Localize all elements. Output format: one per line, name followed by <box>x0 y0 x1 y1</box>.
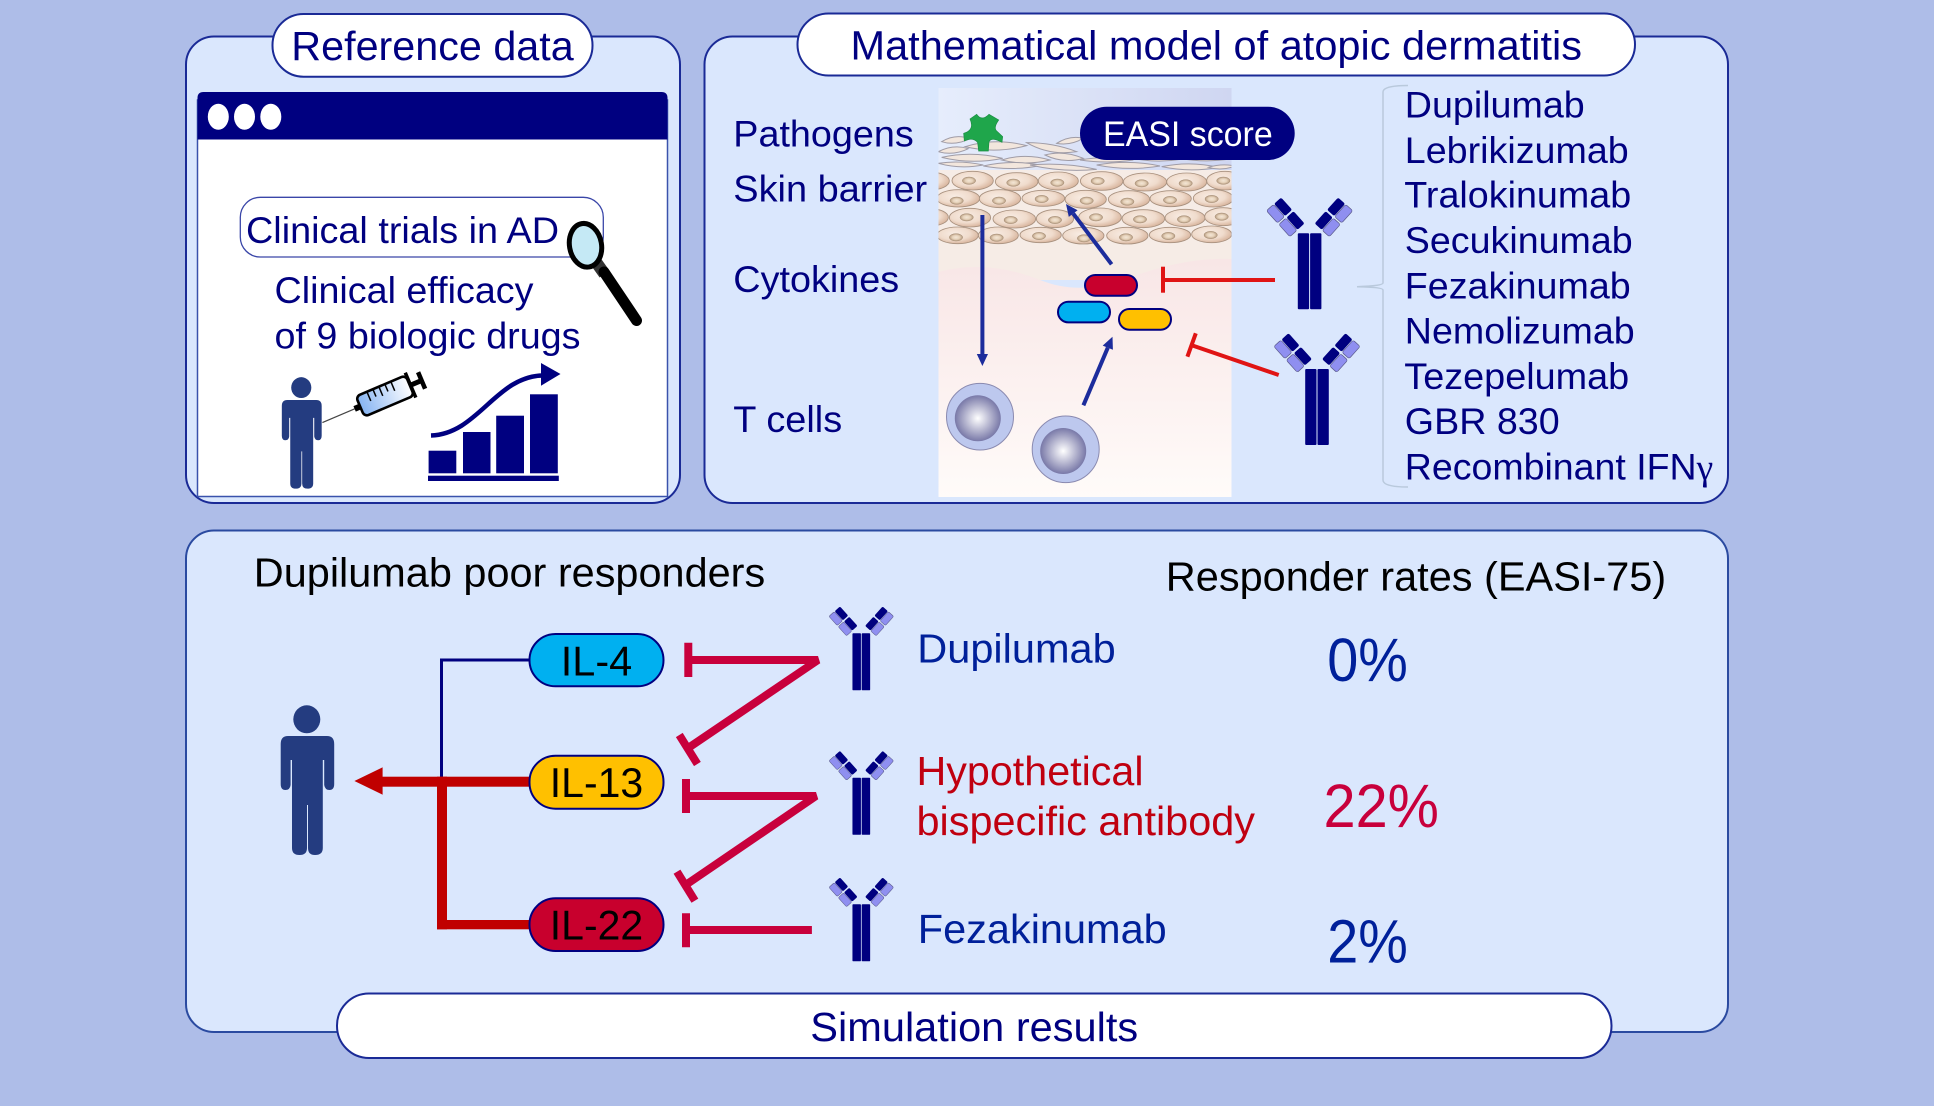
drug list: Secukinumab <box>1405 219 1633 261</box>
T cells <box>946 383 1099 483</box>
cytokine: IL-13: IL-13 <box>550 759 643 806</box>
label: EASI score: EASI score <box>1103 114 1273 154</box>
inhibition: fezakinumab <box>686 913 812 947</box>
chart: rising bars with arrow <box>428 363 560 481</box>
icon: antibody fezakinumab <box>829 877 894 961</box>
panel: reference data <box>186 14 680 503</box>
cytokine: IL-22: IL-22 <box>550 901 643 948</box>
drug list: Tezepelumab <box>1404 355 1629 397</box>
drug label: hypothetical bispecific antibody: Hypothetical <box>916 748 1144 794</box>
row labels: Skin barrier <box>733 168 927 209</box>
inhibition line: upper antibody <box>1163 267 1275 293</box>
inhibition: dupilumab <box>679 643 818 764</box>
icon: patient <box>281 705 334 855</box>
row labels: T cells <box>733 399 842 440</box>
cytokine pills <box>1058 275 1171 330</box>
text: clinical efficacy <box>274 269 580 356</box>
panel: mathematical model <box>704 14 1728 503</box>
arrow: T cells to cytokines <box>1083 337 1113 405</box>
search box: clinical trials: Clinical trials in AD <box>246 209 559 251</box>
drug list: Tralokinumab <box>1404 174 1631 216</box>
search box: clinical trials <box>240 197 603 257</box>
value: fezakinumab 2%: 2% <box>1327 907 1408 975</box>
drug label: hypothetical bispecific antibody <box>916 748 1256 844</box>
icon: patient <box>282 377 322 489</box>
label: EASI score <box>1080 107 1295 160</box>
cytokine: IL-4 <box>530 634 664 686</box>
text: clinical efficacy: Clinical efficacy <box>274 269 534 311</box>
drug list: GBR 830 <box>1405 400 1560 442</box>
icon: antibody bispecific <box>829 751 894 835</box>
arrow: barrier to T cells <box>977 215 988 366</box>
row labels: Cytokines <box>733 259 899 300</box>
row labels: Pathogens <box>733 113 914 154</box>
drug label: fezakinumab: Fezakinumab <box>918 906 1167 952</box>
pathway connector: IL-4 <box>442 660 530 777</box>
pathway arrow: IL-13 and IL-22 to patient <box>354 767 530 929</box>
drug list: Nemolizumab <box>1405 310 1635 352</box>
arrow: cytokines to skin barrier <box>1066 204 1112 264</box>
value: bispecific 22%: 22% <box>1324 772 1439 840</box>
browser window <box>198 92 668 496</box>
drug label: dupilumab: Dupilumab <box>917 625 1116 671</box>
heading: reference data <box>272 14 592 77</box>
icon: pathogen <box>964 114 1003 151</box>
heading: responder rates: Responder rates (EASI-75) <box>1166 554 1666 600</box>
drug list: Lebrikizumab <box>1405 129 1629 171</box>
illustration: skin layers <box>938 88 1232 497</box>
cytokine: IL-13 <box>530 756 664 809</box>
drug list <box>1404 84 1713 489</box>
cytokine: IL-22 <box>530 898 664 951</box>
text: clinical efficacy: of 9 biologic drugs <box>274 314 580 356</box>
cytokine: IL-4: IL-4 <box>561 638 632 685</box>
icon: syringe <box>317 367 429 435</box>
icon: antibody upper <box>1266 197 1353 309</box>
row labels <box>733 113 927 440</box>
inhibition: bispecific antibody <box>677 779 816 901</box>
bracket <box>1357 86 1408 487</box>
heading: simulation results: Simulation results <box>810 1004 1138 1050</box>
icon: magnifying glass <box>566 221 636 320</box>
heading: reference data: Reference data <box>291 23 574 69</box>
drug label: hypothetical bispecific antibody: bispecific antibody <box>916 798 1256 844</box>
inhibition line: lower antibody <box>1187 333 1279 375</box>
heading: dupilumab poor responders: Dupilumab poor responders <box>254 550 765 596</box>
drug list: Fezakinumab <box>1405 264 1631 306</box>
heading: simulation results <box>337 994 1612 1058</box>
drug list: Recombinant IFNγ <box>1405 446 1713 489</box>
icon: antibody lower <box>1274 333 1360 445</box>
value: dupilumab 0%: 0% <box>1327 626 1408 694</box>
heading: mathematical model: Mathematical model of atopic dermatitis <box>850 22 1582 68</box>
heading: mathematical model <box>798 14 1635 76</box>
panel: simulation results <box>186 530 1728 1058</box>
icon: antibody dupilumab <box>829 606 894 690</box>
drug list: Dupilumab <box>1405 84 1585 126</box>
